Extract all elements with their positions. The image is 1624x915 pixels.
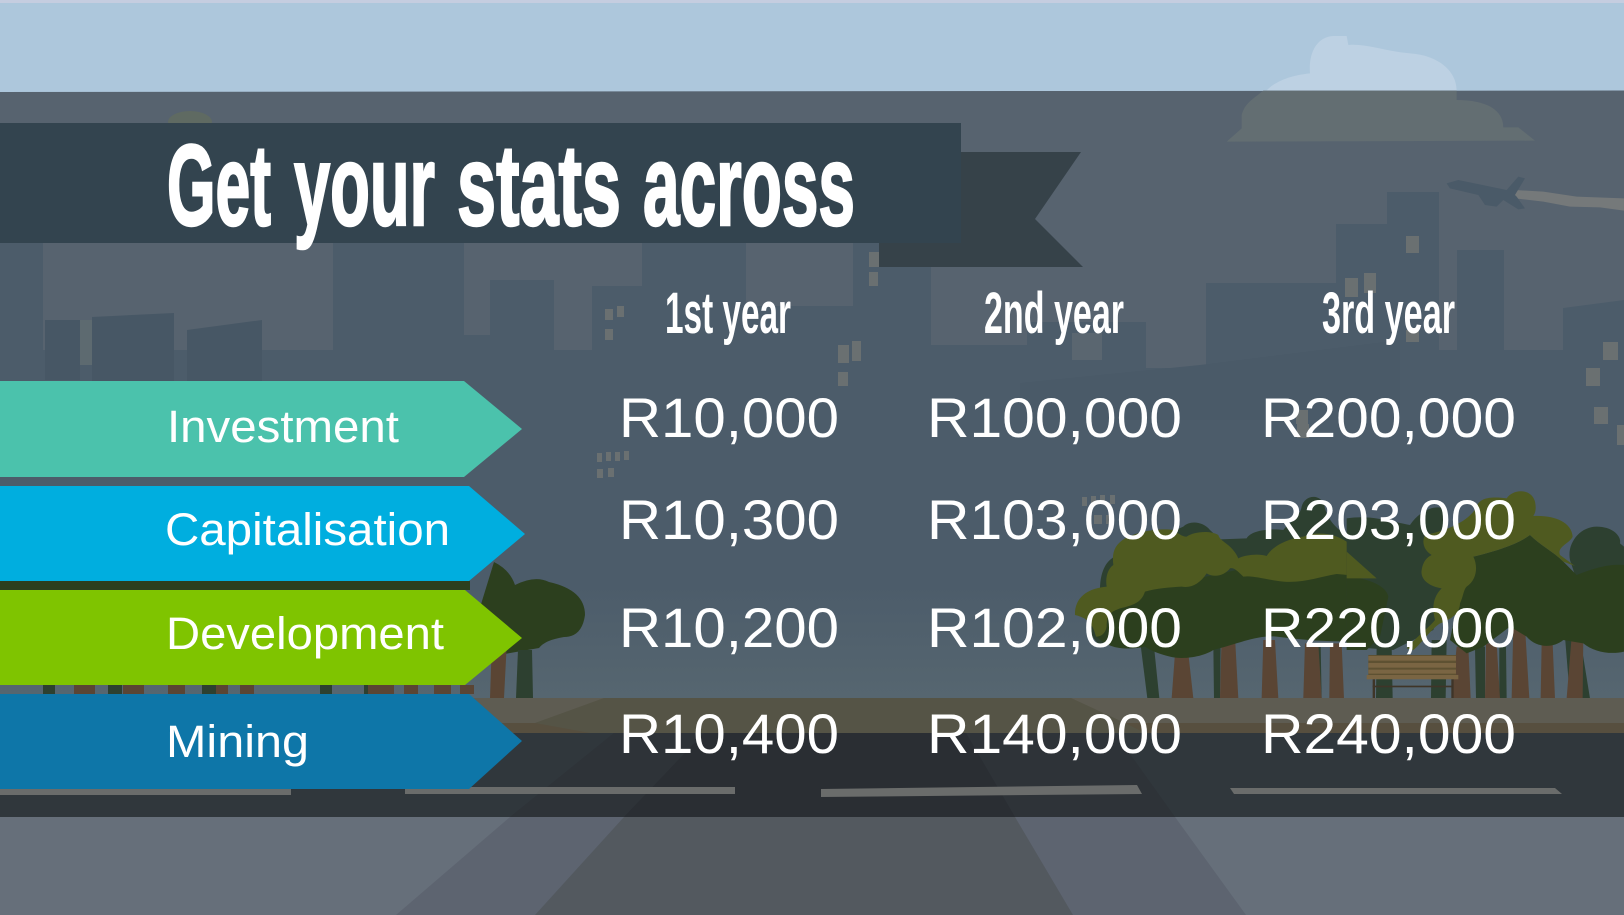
left trees [0,562,585,698]
right trees, right cluster [1347,491,1624,698]
lane markings [0,785,1562,797]
title: across [643,122,855,250]
dark foliage [1347,535,1624,653]
row: Development [0,590,1516,685]
cloud [1227,36,1535,142]
back trunks [1376,637,1590,698]
column headers [665,281,1455,346]
arrow: Capitalisation [0,486,525,581]
header: 2nd year: 2nd year [984,281,1124,346]
value: R10,000: R10,000 [619,386,839,449]
title: your [294,122,435,250]
value: R203,000: R203,000 [1261,488,1516,551]
value: R240,000: R240,000 [1261,702,1516,765]
title [167,122,855,250]
title: stats [457,122,621,250]
dark foliage [1097,570,1373,658]
header: 1st year: 1st year [665,281,791,346]
olive foliage [1075,529,1390,637]
label: Investment: Investment [167,401,400,452]
value: R10,200: R10,200 [619,596,839,659]
arrow: Investment [0,381,522,477]
value: R10,400: R10,400 [619,702,839,765]
value: R140,000: R140,000 [927,702,1182,765]
plane and contrail [1447,177,1624,211]
label: Mining: Mining [166,716,309,767]
foreground pavement [0,817,1624,915]
olive foliage [1347,491,1575,650]
label: Development: Development [166,608,445,659]
arrow: Mining [0,694,522,789]
sky [0,0,1624,93]
value: R220,000: R220,000 [1261,596,1516,659]
ribbon band [0,123,961,243]
value: R100,000: R100,000 [927,386,1182,449]
park bench [1367,655,1458,698]
header: 3rd year: 3rd year [1322,281,1455,346]
arrow: Development [0,590,522,685]
front trunks [1452,627,1583,698]
row: Mining [0,694,1516,789]
road [0,733,1624,817]
title ribbon [0,122,1083,267]
value: R10,300: R10,300 [619,488,839,551]
dusk overlay ground [0,90,1624,698]
value: R103,000: R103,000 [927,488,1182,551]
title: Get [167,122,271,250]
trunks [1140,637,1344,698]
row: Investment [0,381,1516,477]
right trees, left cluster [1075,497,1390,698]
ribbon tail [879,152,1083,267]
sidewalk [0,698,1624,733]
row: Capitalisation [0,486,1516,581]
back foliage [1088,497,1373,647]
label: Capitalisation: Capitalisation [165,504,450,555]
background buildings [0,111,1624,698]
value: R102,000: R102,000 [927,596,1182,659]
value: R200,000: R200,000 [1261,386,1516,449]
back foliage [1347,507,1624,650]
